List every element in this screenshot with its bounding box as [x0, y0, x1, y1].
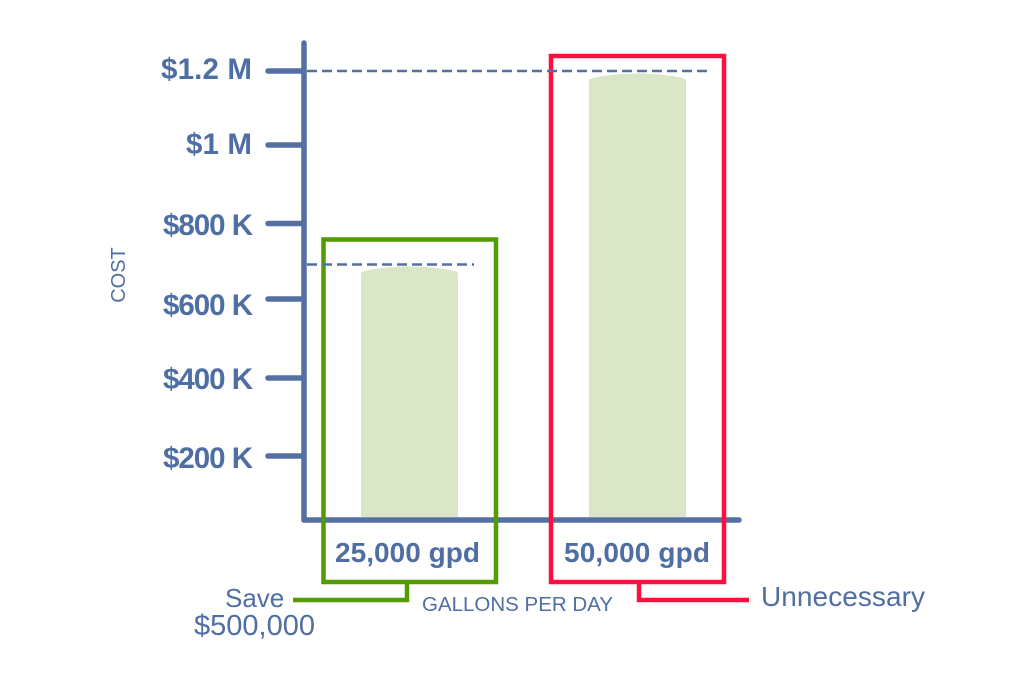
green highlight box with connector — [293, 240, 496, 600]
y axis title: COST — [108, 247, 130, 303]
red highlight box with connector — [551, 56, 749, 600]
category label: 50,000 gpd: 50,000 gpd — [564, 537, 710, 568]
category label: 25,000 gpd: 25,000 gpd — [335, 537, 480, 568]
y axis labels: $600 K — [163, 289, 254, 322]
callout: save: $500,000 — [194, 610, 315, 642]
callout: save: Save — [225, 583, 284, 613]
x axis title: GALLONS PER DAY — [422, 593, 613, 616]
y axis labels — [161, 53, 254, 475]
y axis with ticks — [268, 43, 304, 520]
y axis labels: $800 K — [163, 209, 254, 242]
dashed line: 1.2 M — [307, 70, 708, 72]
bar: 25,000 gpd — [361, 266, 458, 517]
bar: 50,000 gpd — [589, 74, 686, 517]
dashed line: 25,000 gpd cost — [307, 263, 474, 266]
y axis labels: $1 M — [186, 128, 252, 161]
x axis — [304, 517, 739, 523]
y axis labels: $1.2 M — [161, 53, 252, 86]
y axis labels: $200 K — [163, 442, 254, 475]
callout: save — [194, 583, 315, 642]
y axis labels: $400 K — [163, 363, 254, 396]
callout: unnecessary: Unnecessary — [761, 581, 925, 612]
